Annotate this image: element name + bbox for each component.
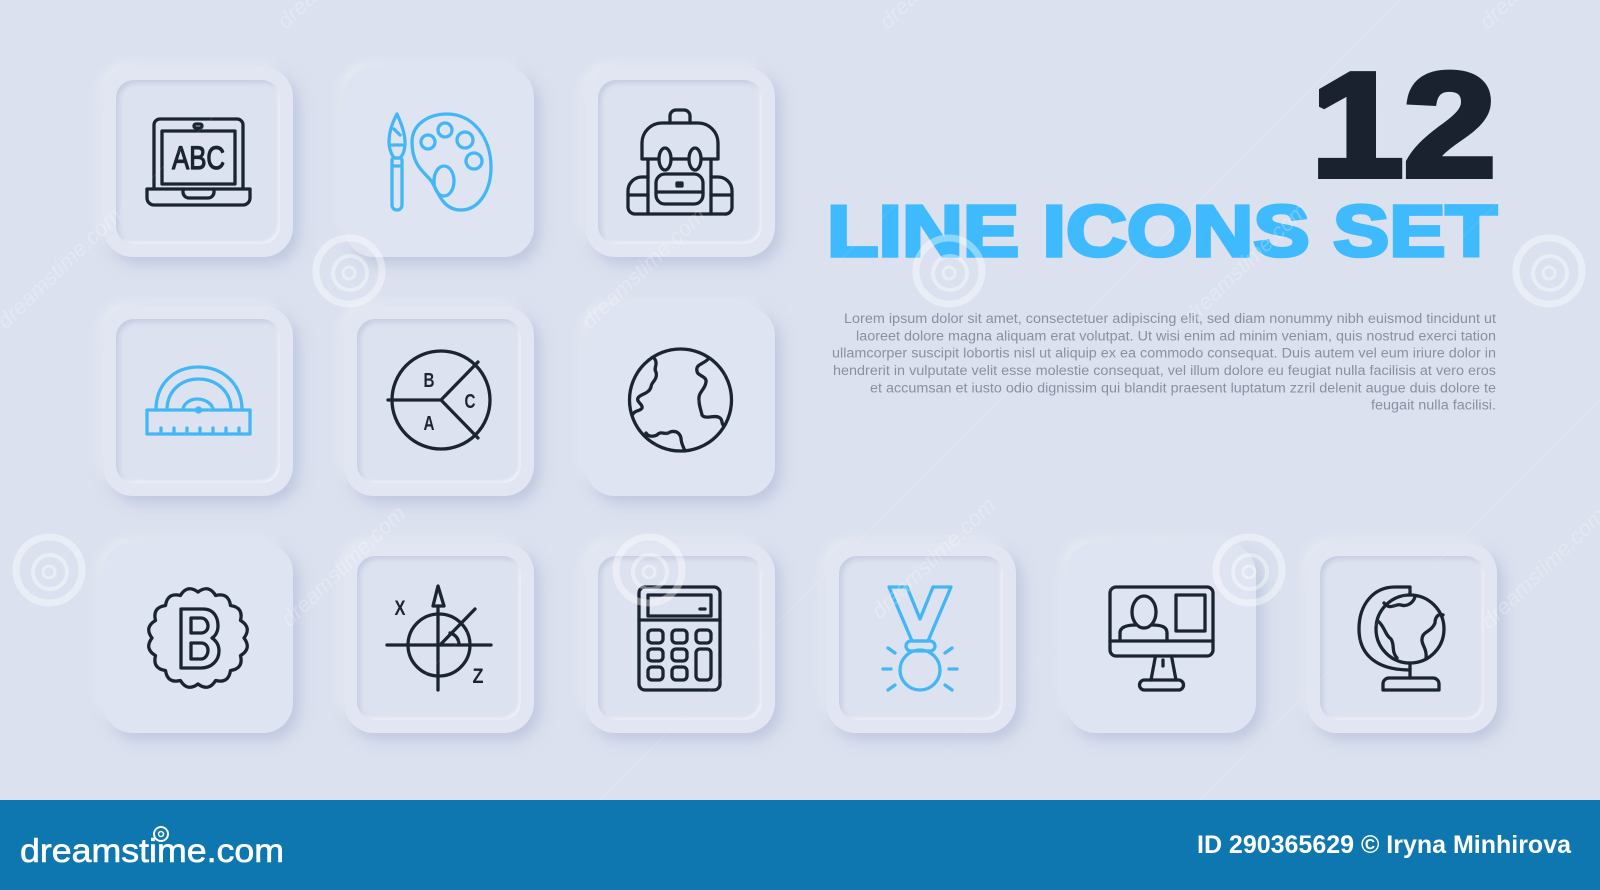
panel: monitor card	[1066, 543, 1256, 733]
heading: line icons set: LINE ICONS SET	[827, 192, 1497, 270]
panel: palette card	[344, 67, 534, 257]
panel: protractor card	[103, 306, 293, 496]
panel: backpack card	[585, 67, 775, 257]
panel: B badge card	[103, 543, 293, 733]
icon: earth	[628, 347, 734, 453]
panel: pie chart card	[344, 306, 534, 496]
text block: lorem ipsum: feugait nulla facilisi.	[1371, 398, 1496, 413]
icon: coordinate graph xyz: X	[394, 597, 406, 620]
watermark layer: dreamstime.com	[866, 493, 1000, 624]
panel: graph card	[344, 543, 534, 733]
icon: protractor	[145, 365, 252, 436]
icon: pie chart ABC: C	[464, 391, 476, 413]
panel: medal card	[826, 543, 1016, 733]
icon: backpack	[626, 108, 734, 216]
icon: medal	[881, 585, 959, 692]
text block: lorem ipsum: hendrerit in vulputate velit esse molestie consequat, vel illum dolore eu feugiat nulla facilisis at vero eros	[833, 363, 1496, 378]
icon: brush and palette	[387, 112, 493, 212]
panel: desk globe card	[1307, 543, 1497, 733]
text block: lorem ipsum	[832, 311, 1496, 413]
icon: coordinate graph xyz: Z	[472, 665, 484, 688]
icon: coordinate graph xyz	[385, 584, 493, 692]
footer credit: ID 290365629 © Iryna Minhirova	[1197, 831, 1572, 859]
footer bar	[0, 800, 1600, 890]
text block: lorem ipsum: et accumsan et iusto odio dignissim qui blandit praesent luptatum zzril delenit augue duis dolore te	[870, 380, 1496, 395]
icon: laptop with ABC: ABC	[172, 140, 225, 176]
text block: lorem ipsum: Lorem ipsum dolor sit amet, consectetuer adipiscing elit, sed diam nonummy nibh euismod tincidunt ut	[844, 311, 1496, 326]
icon: desk globe	[1357, 585, 1446, 692]
icon: pie chart ABC: B	[424, 370, 434, 392]
watermark layer: dreamstime.com	[576, 203, 710, 334]
icon: laptop with ABC	[145, 117, 252, 207]
icon: calculator	[637, 585, 722, 692]
text block: lorem ipsum: laoreet dolore magna aliquam erat volutpat. Ut wisi enim ad minim veniam, quis nostrud exerci tation	[856, 328, 1496, 343]
footer logo: dreamstime.com	[20, 832, 284, 869]
icon: monitor with video call	[1108, 585, 1215, 692]
panel: calculator card	[585, 543, 775, 733]
text block: lorem ipsum: ullamcorper suscipit lobortis nisl ut aliquip ex ea commodo consequat. Duis autem vel eum iriure dolor in	[832, 346, 1496, 361]
watermark layer: dreamstime.com	[276, 501, 410, 632]
icon: wavy badge with letter B	[147, 587, 249, 689]
watermark layer: dreamstime.com	[1178, 198, 1312, 329]
icon: pie chart ABC: A	[424, 413, 434, 435]
panel: earth card	[585, 306, 775, 496]
icon: pie chart ABC	[386, 349, 492, 451]
panel: laptop ABC card	[103, 67, 293, 257]
